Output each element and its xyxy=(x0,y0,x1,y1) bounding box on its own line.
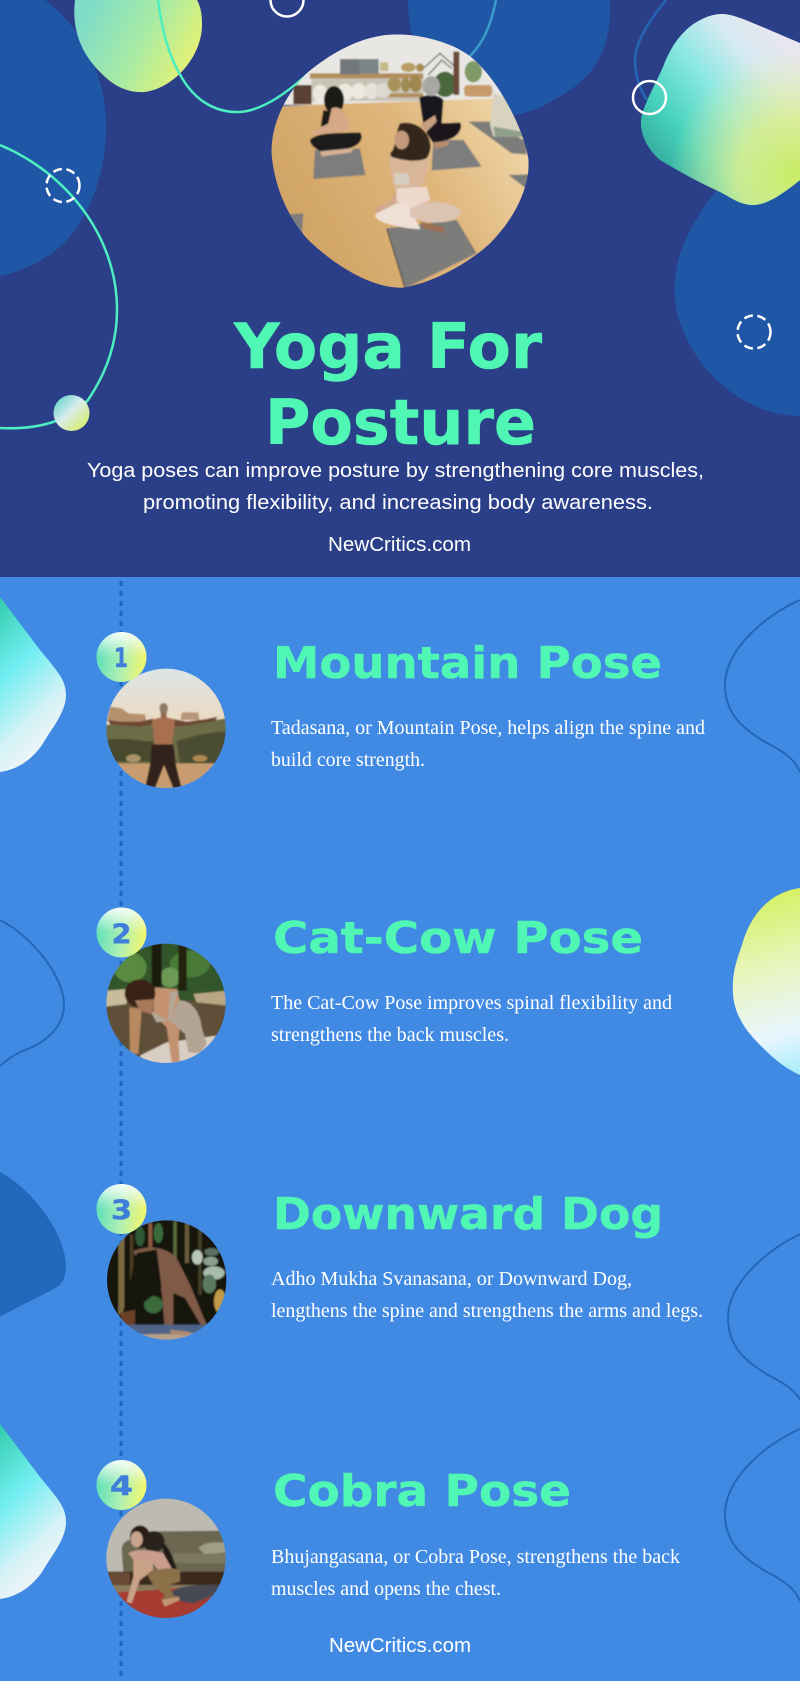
description: Bhujangasana, or Cobra Pose, strengthens the back xyxy=(271,1546,680,1568)
outline: right 4 xyxy=(725,1429,800,1601)
hero site credit: NewCritics.com xyxy=(328,534,471,556)
description: lengthens the spine and strengthens the arms and legs. xyxy=(271,1300,703,1322)
hero description xyxy=(87,460,704,514)
photo: mountain pose xyxy=(103,667,230,792)
number badge 2 xyxy=(96,908,146,958)
step 3: Downward Dog xyxy=(96,1184,703,1345)
description xyxy=(271,1546,680,1600)
photo: downward dog xyxy=(107,1220,226,1340)
heading: Mountain Pose xyxy=(273,638,662,689)
panel: steps background xyxy=(0,577,800,1681)
outline: right 3 xyxy=(728,1233,800,1405)
hero description: promoting flexibility, and increasing body awareness. xyxy=(143,492,653,514)
description: Adho Mukha Svanasana, or Downward Dog, xyxy=(271,1268,632,1290)
ring: right xyxy=(633,81,666,114)
description: strengthens the back muscles. xyxy=(271,1024,509,1046)
number badge 2: 2 xyxy=(112,919,132,950)
step 4: Cobra Pose xyxy=(96,1460,680,1620)
curve: top wave right part xyxy=(469,0,496,57)
photo: cobra pose xyxy=(106,1498,226,1618)
outline: right 1 xyxy=(725,600,800,772)
dashed ring: left xyxy=(46,169,80,202)
curve: top wave xyxy=(158,0,310,112)
blob: left dark 3 xyxy=(0,1172,66,1317)
blob: top right gradient xyxy=(641,14,800,205)
number badge 1 xyxy=(96,632,146,682)
heading: Cobra Pose xyxy=(273,1466,571,1517)
timeline dotted line xyxy=(120,581,122,1681)
step 1: Mountain Pose xyxy=(96,632,705,792)
dashed ring: right xyxy=(738,316,770,348)
number badge 4 xyxy=(96,1460,146,1510)
outline: left 2 xyxy=(0,920,64,1066)
blob: right gradient 2 xyxy=(733,888,800,1075)
hero description: Yoga poses can improve posture by strengthening core muscles, xyxy=(87,460,704,482)
blob: top left gradient xyxy=(74,0,202,92)
steps decorations xyxy=(0,597,800,1601)
panel: hero background xyxy=(0,0,800,578)
number badge 3 xyxy=(96,1184,146,1234)
hero photo: yoga class xyxy=(272,34,529,288)
heading: Cat-Cow Pose xyxy=(273,913,643,964)
number badge 4: 4 xyxy=(110,1471,133,1502)
curve: left arc xyxy=(0,145,117,428)
blob: top left dark xyxy=(0,0,106,276)
photo: cat-cow pose xyxy=(103,942,230,1067)
heading: Downward Dog xyxy=(273,1189,663,1240)
hero decorations xyxy=(0,0,800,431)
description: Tadasana, or Mountain Pose, helps align the spine and xyxy=(271,717,705,739)
description: build core strength. xyxy=(271,749,425,771)
step 2: Cat-Cow Pose xyxy=(96,908,672,1067)
hero title: Posture xyxy=(265,386,536,459)
blob: left gradient 1 xyxy=(0,597,66,772)
description xyxy=(271,1268,703,1322)
ball on arc xyxy=(54,395,90,431)
blob: right dark xyxy=(675,175,800,416)
ring: top xyxy=(270,0,304,16)
blob: left gradient 4 xyxy=(0,1424,66,1599)
footer site credit: NewCritics.com xyxy=(329,1635,471,1657)
description: The Cat-Cow Pose improves spinal flexibility and xyxy=(271,992,672,1014)
number badge 3: 3 xyxy=(111,1195,132,1226)
curve: top right thin xyxy=(635,0,666,100)
hero title xyxy=(233,310,542,459)
blob: top centre dark xyxy=(408,0,610,116)
hero title: Yoga For xyxy=(233,310,542,383)
description xyxy=(271,992,672,1046)
number badge 1: 1 xyxy=(114,643,128,674)
description: muscles and opens the chest. xyxy=(271,1578,501,1600)
description xyxy=(271,717,705,771)
